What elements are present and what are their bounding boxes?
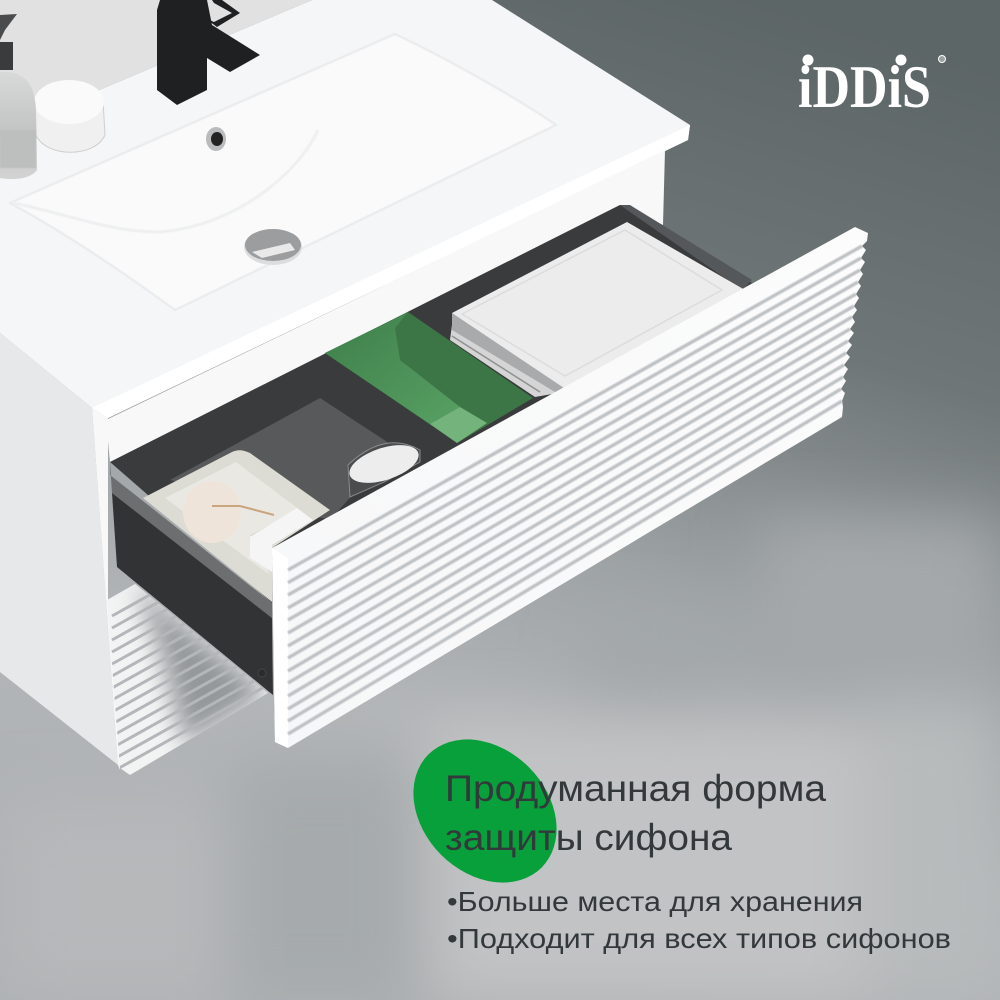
lower drawer with ribs	[108, 584, 268, 775]
heading	[445, 768, 826, 858]
logo dots	[802, 54, 906, 66]
glass jar	[345, 438, 423, 497]
rib shadows	[288, 246, 862, 734]
soap	[250, 508, 313, 572]
wall	[0, 0, 312, 132]
open drawer interior	[110, 205, 752, 695]
cabinet side	[0, 333, 118, 765]
sponge	[183, 481, 241, 543]
bullet 1: •Больше места для хранения	[447, 886, 863, 917]
ribbed drawer front	[272, 227, 868, 748]
heading: Продуманная форма	[445, 768, 826, 809]
bullet list	[447, 886, 951, 954]
logo: iDDiS	[798, 54, 931, 120]
basin	[10, 34, 556, 310]
countertop sink	[0, 0, 690, 418]
folded towels	[450, 222, 745, 397]
green storage divider	[325, 312, 533, 443]
soap bottle	[0, 14, 37, 179]
faucet	[157, 0, 260, 105]
registered mark	[938, 56, 946, 62]
jar	[34, 80, 105, 152]
drain overflow	[206, 127, 226, 151]
drawer side wall	[112, 493, 273, 695]
drawer side rim	[110, 462, 272, 618]
bullet 2: •Подходит для всех типов сифонов	[447, 923, 951, 954]
green blob	[385, 711, 585, 911]
drain plug	[244, 229, 302, 265]
cabinet front frame	[92, 150, 665, 770]
drawer screw	[258, 669, 266, 677]
heading: защиты сифона	[445, 817, 732, 858]
tray with sponge and soap	[143, 450, 330, 602]
